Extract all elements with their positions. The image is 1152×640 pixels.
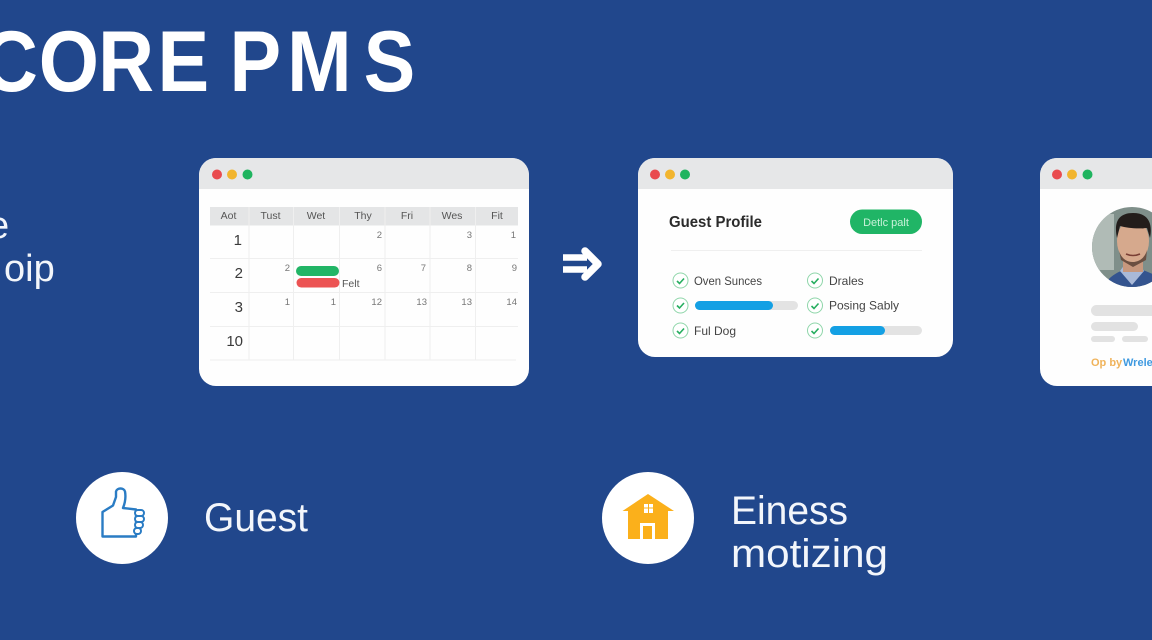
week numbers: 1 — [234, 232, 242, 249]
calendar header row: Wet — [307, 210, 325, 222]
calendar grid — [210, 207, 518, 360]
window controls — [650, 170, 690, 180]
icon: thumbs up — [76, 472, 168, 564]
feature: business — [602, 472, 888, 576]
feature: guest — [76, 472, 308, 564]
week numbers — [226, 232, 243, 350]
calendar header row: Thy — [354, 210, 372, 222]
placeholder lines — [1091, 305, 1152, 342]
caption — [1091, 357, 1152, 369]
date numbers: 14 — [506, 297, 517, 308]
status pill — [850, 210, 922, 234]
date numbers: 2 — [377, 230, 382, 241]
calendar header row — [210, 207, 518, 226]
left cropped text: oip — [4, 248, 55, 290]
window controls — [1052, 170, 1092, 180]
date numbers: 13 — [416, 297, 427, 308]
label: business — [731, 489, 888, 576]
checklist labels: Posing Sably — [829, 298, 899, 312]
date numbers: 1 — [285, 297, 290, 308]
date numbers — [285, 230, 517, 308]
window controls — [212, 170, 252, 180]
checklist labels: Ful Dog — [694, 324, 736, 338]
checklist labels: Oven Sunces — [694, 274, 762, 288]
panel: guest card — [1040, 158, 1152, 386]
calendar header row: Tust — [260, 210, 281, 222]
date numbers: 1 — [511, 230, 516, 241]
date numbers: 12 — [371, 297, 382, 308]
week numbers: 3 — [235, 299, 243, 316]
calendar events: Felt — [342, 278, 360, 290]
date numbers: 3 — [467, 230, 472, 241]
checklist labels: Drales — [829, 274, 864, 288]
date numbers: 2 — [285, 263, 290, 274]
calendar header row: Fri — [401, 210, 413, 222]
date numbers: 1 — [331, 297, 336, 308]
checklist icons — [673, 273, 822, 338]
icon: house — [602, 472, 694, 564]
caption: Op by — [1091, 357, 1123, 369]
date numbers: 7 — [421, 263, 426, 274]
calendar events — [296, 266, 360, 290]
date numbers: 9 — [512, 263, 517, 274]
week numbers: 10 — [226, 333, 243, 350]
calendar header row: Fit — [491, 210, 503, 222]
calendar header row: Wes — [442, 210, 462, 222]
avatar — [1090, 205, 1152, 289]
progress bars — [695, 301, 922, 335]
panel: calendar — [199, 158, 529, 386]
checklist labels — [694, 274, 899, 338]
label: business: motizing — [731, 532, 888, 576]
caption: Wrele — [1123, 357, 1152, 369]
label: guest: Guest — [204, 496, 308, 540]
status pill: Detlc palt — [863, 217, 909, 229]
label: business: Einess — [731, 489, 848, 533]
date numbers: 8 — [467, 263, 472, 274]
calendar header row: Aot — [221, 210, 236, 222]
week numbers: 2 — [235, 265, 243, 282]
date numbers: 6 — [377, 263, 382, 274]
panel: guest profile — [638, 158, 953, 357]
arrow — [563, 251, 598, 277]
profile heading: Guest Profile — [669, 214, 762, 231]
date numbers: 13 — [461, 297, 472, 308]
left cropped text — [0, 205, 55, 290]
